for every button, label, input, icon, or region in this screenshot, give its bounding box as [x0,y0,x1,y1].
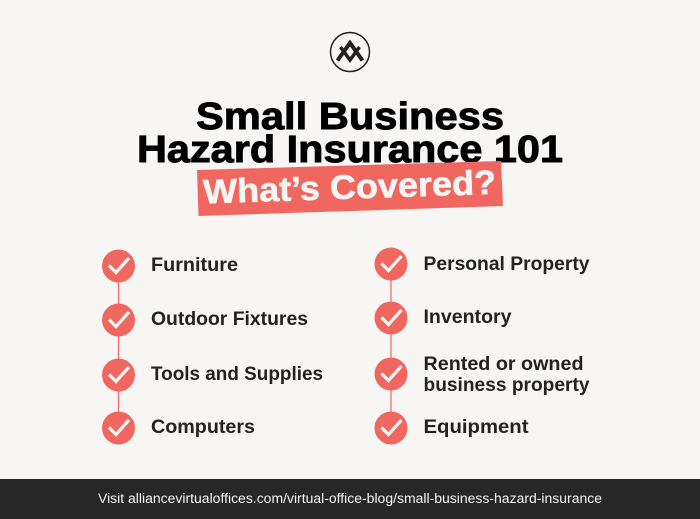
item: Computers [102,412,255,444]
item: Rented or owned business property: Rented or owned [424,354,584,375]
item: Personal Property [374,248,590,280]
right checklist [374,248,590,444]
item: Inventory [374,302,512,334]
title [137,96,563,171]
footer bar: Visit alliancevirtualoffices.com/virtual-office-blog/small-business-hazard-insurance [98,491,602,506]
footer bar [0,479,700,519]
title: Small Business [196,96,504,138]
subtitle banner: What’s Covered? [203,164,497,211]
item: Outdoor Fixtures [102,304,308,336]
title: Hazard Insurance 101 [137,129,563,171]
item: Furniture: Furniture [151,255,238,276]
item: Equipment: Equipment [424,417,529,438]
item: Equipment [374,412,529,444]
item: Rented or owned business property [374,354,590,396]
item: Inventory: Inventory [424,307,512,328]
logo [330,32,370,72]
item: Furniture [102,250,238,282]
left checklist [102,250,323,444]
item: Tools and Supplies: Tools and Supplies [151,364,323,385]
item: Personal Property: Personal Property [424,254,590,275]
item: Tools and Supplies [102,358,323,392]
item: Outdoor Fixtures: Outdoor Fixtures [151,309,308,330]
item: Computers: Computers [151,417,255,438]
item: Rented or owned business property: business property [424,375,590,396]
